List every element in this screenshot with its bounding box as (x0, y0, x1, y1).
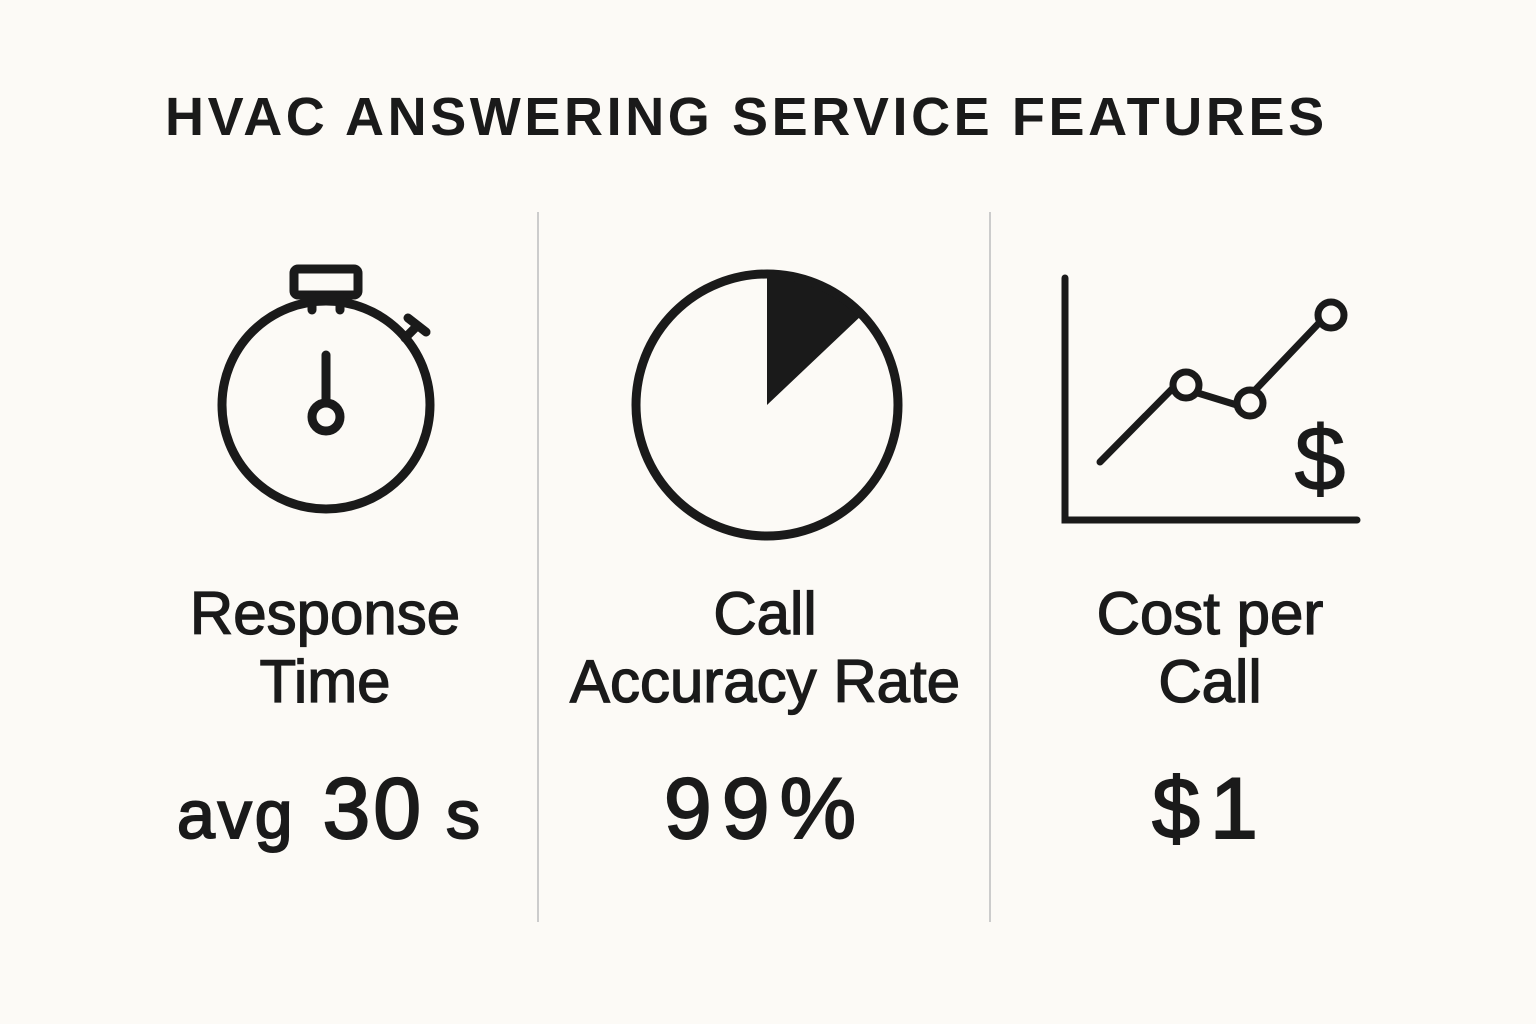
label: call accuracy rate: Call (713, 580, 817, 647)
value: $1: $1 (1152, 761, 1268, 857)
panel: response time (218, 264, 434, 514)
title: HVAC ANSWERING SERVICE FEATURES (165, 87, 1328, 147)
label: call accuracy rate (569, 580, 960, 716)
panel: cost per call (1062, 274, 1360, 524)
icon: stopwatch (218, 264, 434, 514)
label: cost per call: Call (1158, 648, 1262, 715)
icon: pie chart (632, 270, 902, 540)
label: cost per call (1097, 580, 1323, 715)
label: response time: Time (259, 648, 391, 715)
label: response time (190, 580, 460, 715)
value: avg 30 s: avg 30 s (177, 761, 483, 857)
icon: line chart with dollar: $ (1294, 408, 1346, 510)
icon: line chart with dollar (1062, 274, 1360, 524)
label: response time: Response (190, 580, 460, 647)
value: 99%: 99% (664, 761, 866, 857)
panel: call accuracy (632, 270, 902, 540)
label: cost per call: Cost per (1097, 580, 1323, 647)
label: call accuracy rate: Accuracy Rate (570, 648, 960, 715)
